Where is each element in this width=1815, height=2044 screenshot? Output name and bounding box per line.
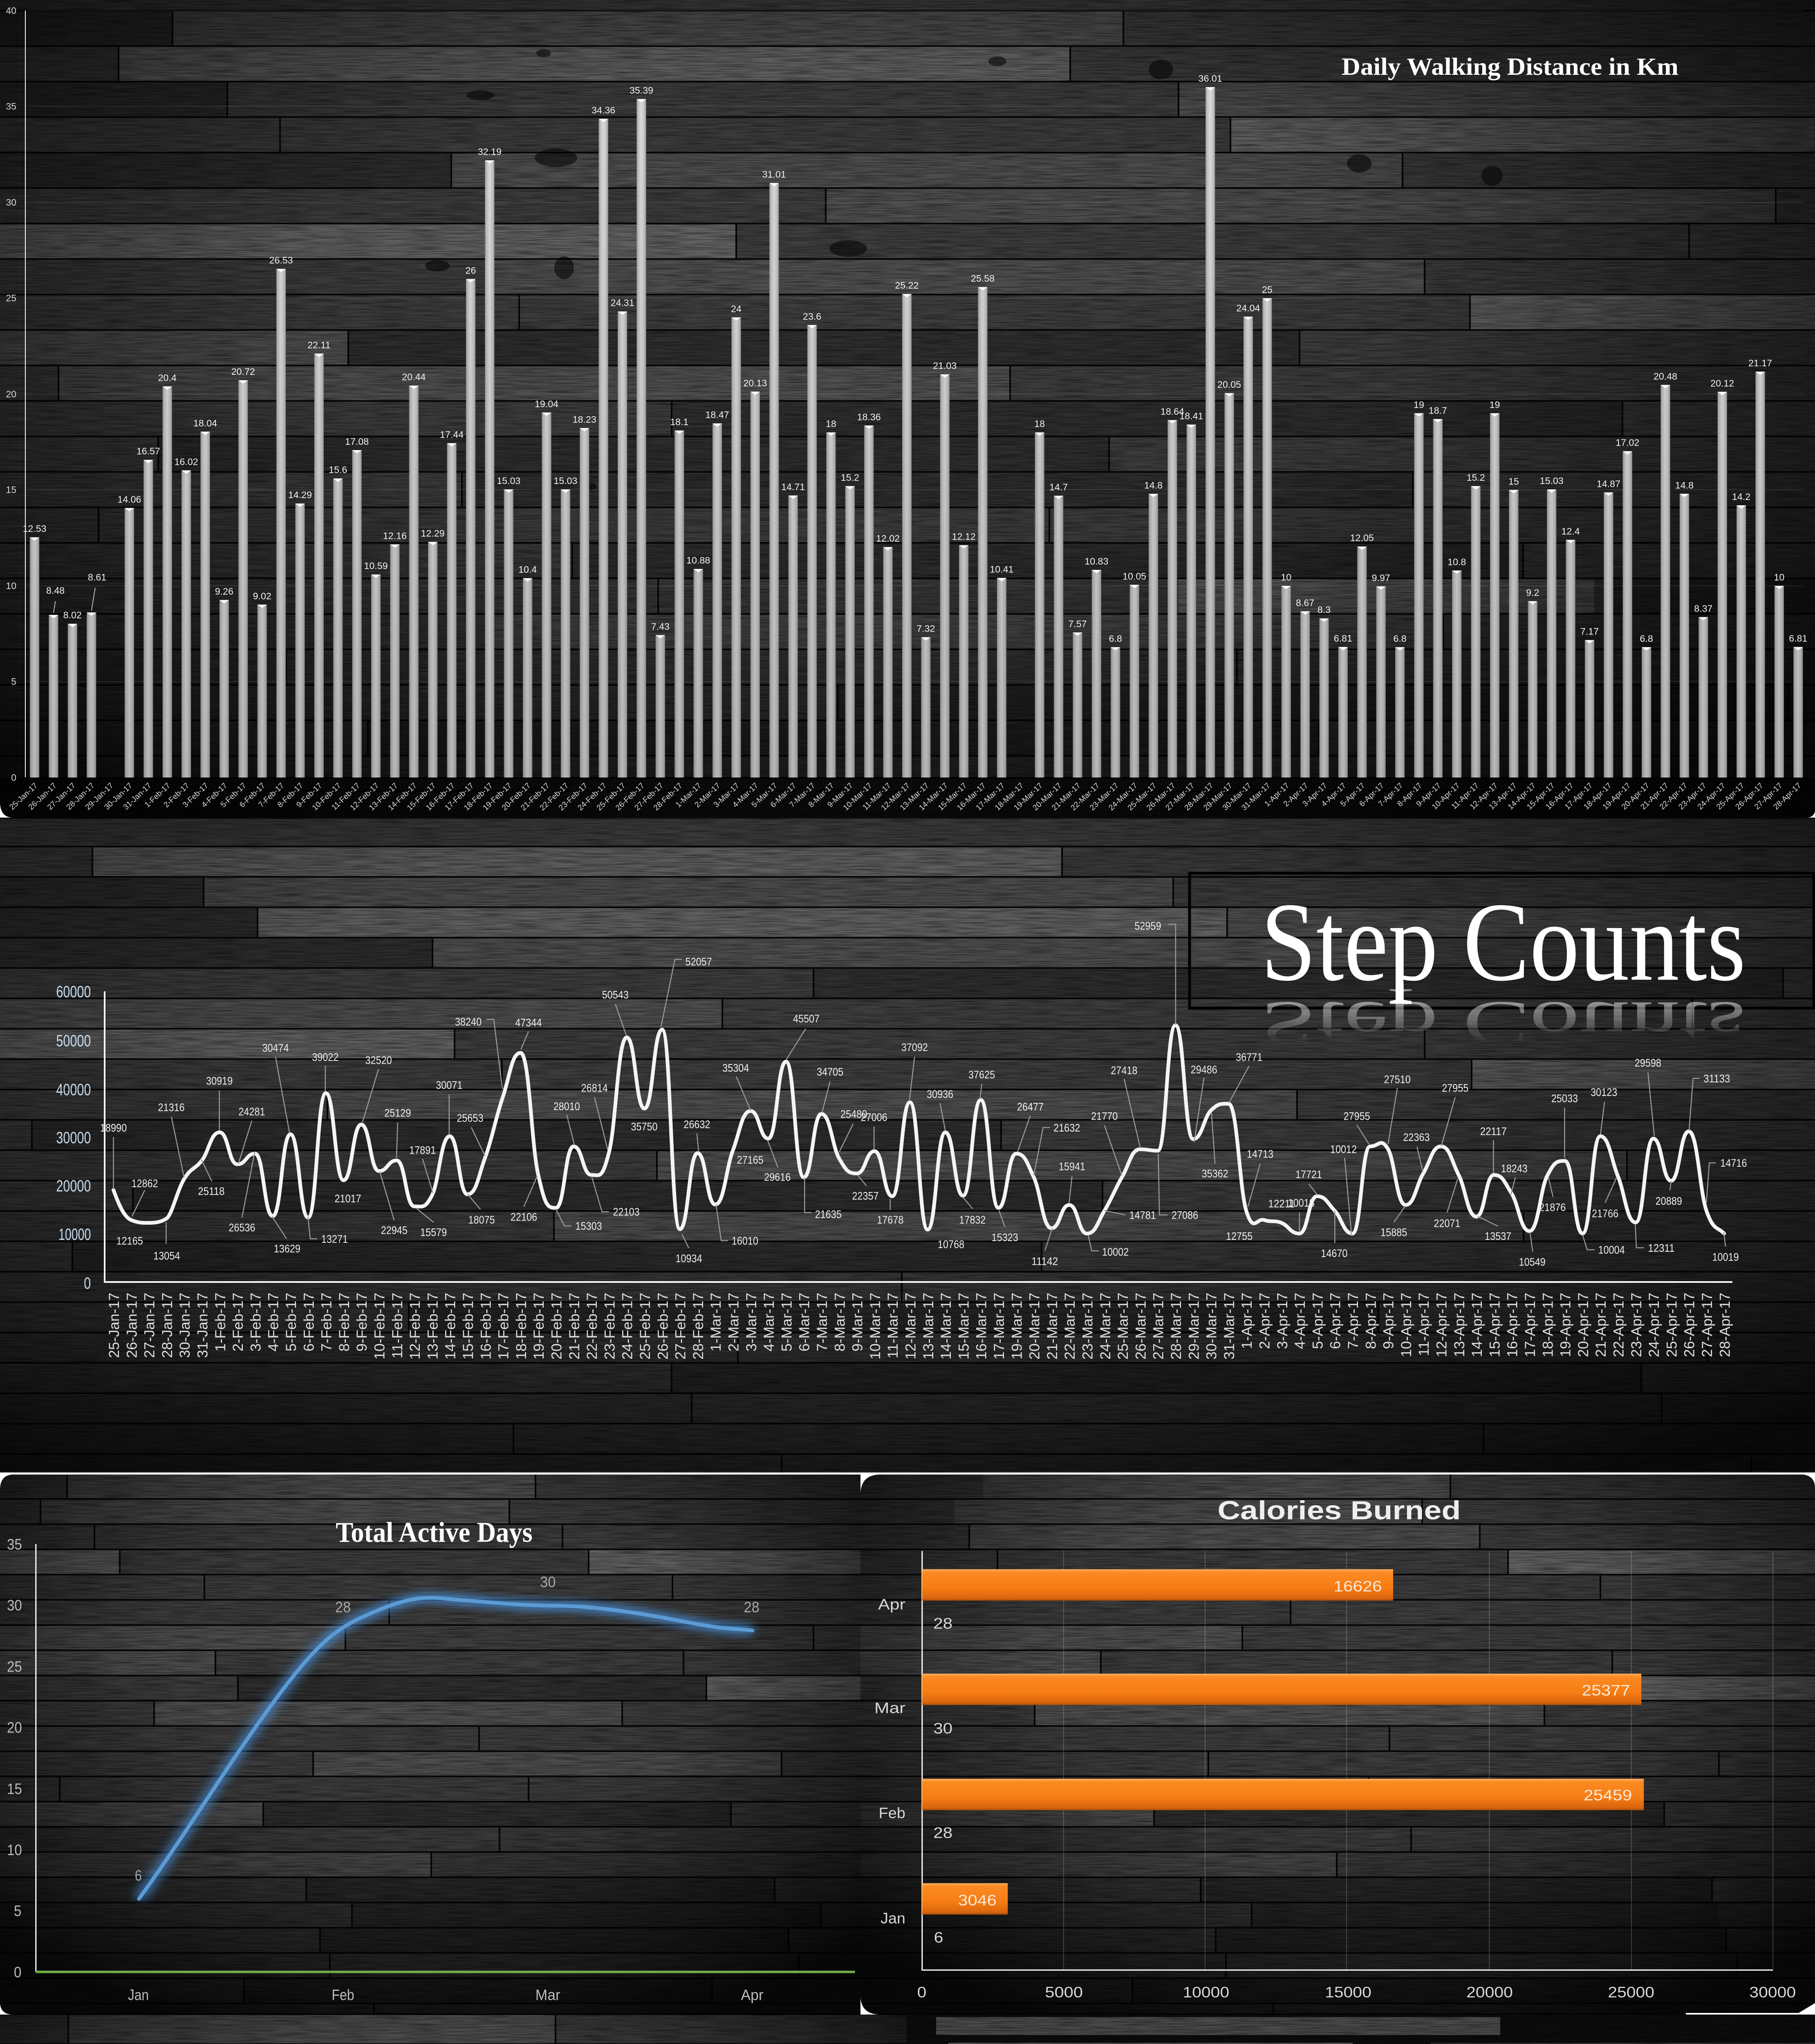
value labels: 27510 bbox=[1384, 1074, 1411, 1086]
value labels: 18243 bbox=[1501, 1163, 1528, 1175]
axes bbox=[35, 1544, 36, 1972]
top section spotlight bbox=[0, 0, 1815, 819]
wood planks: top section bbox=[0, 0, 1815, 823]
bars bbox=[30, 87, 1803, 778]
data labels, leaders, axis numbers and title bbox=[56, 880, 1747, 1292]
value labels: 30123 bbox=[1591, 1086, 1617, 1098]
chart title: Calories Burned bbox=[1217, 1496, 1461, 1525]
doughnut panel spotlight bbox=[0, 2015, 907, 2044]
x axis labels: 0 bbox=[917, 1984, 926, 2001]
value labels: 13537 bbox=[1485, 1230, 1511, 1242]
value labels: 25480 bbox=[840, 1108, 867, 1121]
y axis labels: 30000 bbox=[56, 1128, 91, 1147]
step counts line bbox=[114, 1025, 1724, 1234]
leader lines bbox=[114, 924, 1725, 1252]
y axis labels: 20 bbox=[6, 389, 16, 399]
value labels: 26477 bbox=[1017, 1101, 1044, 1113]
wood planks: calories burned panel bbox=[860, 1474, 1815, 2013]
value labels: 16010 bbox=[732, 1235, 758, 1247]
y axis labels: 30 bbox=[6, 197, 16, 208]
value labels: 22103 bbox=[613, 1206, 640, 1218]
value labels: 12755 bbox=[1226, 1230, 1253, 1242]
white panel frames and corners bbox=[0, 803, 1815, 2044]
month labels: Feb bbox=[879, 1805, 905, 1822]
bars with date and value labels bbox=[8, 73, 1807, 812]
data labels, leaders, axis numbers and title: 10000 bbox=[58, 1225, 91, 1244]
value labels: 17678 bbox=[877, 1214, 903, 1226]
value labels: 21017 bbox=[334, 1192, 361, 1205]
value labels: 10768 bbox=[938, 1238, 964, 1251]
month labels bbox=[128, 1986, 764, 2004]
value labels: 12165 bbox=[117, 1235, 143, 1247]
bar value labels bbox=[958, 1578, 1632, 1909]
chart title: Daily Walking Distance in Km bbox=[1342, 53, 1678, 80]
value labels: 21632 bbox=[1053, 1122, 1080, 1134]
y axis labels: 0 bbox=[84, 1274, 91, 1292]
value labels: 27165 bbox=[737, 1154, 764, 1166]
month labels: Jan bbox=[881, 1910, 905, 1927]
value labels: 12311 bbox=[1648, 1242, 1674, 1254]
value labels: 37092 bbox=[901, 1041, 928, 1053]
panel: daily walking distance bar chart bbox=[6, 5, 1808, 812]
value labels: 14713 bbox=[1247, 1148, 1273, 1160]
value labels: 27086 bbox=[1172, 1209, 1198, 1221]
month labels: Feb bbox=[332, 1986, 354, 2004]
value labels: 15579 bbox=[420, 1226, 447, 1239]
data labels: 28 bbox=[335, 1598, 351, 1616]
value labels: 10934 bbox=[675, 1253, 702, 1265]
month labels bbox=[874, 1596, 905, 1927]
y axis labels: 0 bbox=[14, 1963, 21, 1981]
panel: total active days line chart bbox=[7, 1517, 855, 2004]
y axis labels: 40000 bbox=[56, 1080, 91, 1099]
value labels: 15941 bbox=[1059, 1161, 1085, 1173]
y axis and gridlines bbox=[25, 11, 1808, 778]
wood planks: step counts section bbox=[0, 819, 1815, 1484]
step counts section spotlight bbox=[0, 819, 1815, 1472]
y axis labels: 10 bbox=[6, 580, 16, 591]
y axis labels: 10 bbox=[7, 1841, 22, 1858]
value labels: 15303 bbox=[576, 1220, 602, 1233]
value labels: 22117 bbox=[1480, 1125, 1507, 1138]
value labels: 35362 bbox=[1202, 1168, 1228, 1180]
value labels: 12862 bbox=[131, 1177, 158, 1190]
wood planks: distance doughnut panel bbox=[0, 2015, 907, 2044]
y axis labels: 60000 bbox=[56, 982, 91, 1001]
value labels: 22357 bbox=[852, 1190, 878, 1202]
orange bars bbox=[922, 1569, 1644, 1914]
data labels: 6 bbox=[135, 1867, 142, 1884]
value labels: 30071 bbox=[436, 1079, 462, 1091]
rotated date labels bbox=[8, 781, 1803, 812]
wood planks: total active days panel bbox=[0, 1474, 860, 2013]
y axis labels: 20 bbox=[7, 1719, 22, 1736]
value labels: 27006 bbox=[861, 1111, 887, 1123]
value labels: 14781 bbox=[1129, 1209, 1156, 1221]
month labels: Jan bbox=[128, 1986, 149, 2004]
value labels: 29598 bbox=[1635, 1057, 1661, 1069]
value labels: 17721 bbox=[1295, 1168, 1322, 1181]
value labels: 10019 bbox=[1712, 1251, 1739, 1263]
value labels: 10004 bbox=[1598, 1244, 1625, 1256]
month labels: Apr bbox=[878, 1596, 905, 1613]
value labels: 18990 bbox=[100, 1122, 127, 1134]
value labels: 29616 bbox=[764, 1171, 791, 1183]
value labels: 22363 bbox=[1403, 1131, 1430, 1143]
value labels: 29486 bbox=[1191, 1064, 1217, 1076]
active days labels bbox=[933, 1615, 952, 1946]
value labels: 45507 bbox=[793, 1013, 820, 1025]
value labels: 25118 bbox=[198, 1185, 224, 1197]
x axis labels: 5000 bbox=[1045, 1984, 1083, 2001]
blue line glow bbox=[139, 1598, 753, 1899]
value labels: 14716 bbox=[1720, 1157, 1747, 1169]
value labels: 17832 bbox=[959, 1214, 986, 1226]
vertical date labels bbox=[106, 1293, 1733, 1360]
value labels: 21766 bbox=[1592, 1208, 1618, 1220]
gridlines bbox=[1064, 1551, 1773, 1970]
y axis labels: 5 bbox=[11, 676, 16, 687]
data labels bbox=[135, 1573, 760, 1884]
value labels: 20889 bbox=[1656, 1195, 1682, 1207]
chart title: Total Active Days bbox=[336, 1517, 533, 1548]
value labels: 18075 bbox=[468, 1214, 495, 1226]
value labels: 34705 bbox=[817, 1066, 843, 1078]
x axis labels: 10000 bbox=[1183, 1984, 1229, 2001]
y axis labels bbox=[56, 982, 91, 1292]
x axis labels: 25000 bbox=[1608, 1984, 1654, 2001]
value labels: 14670 bbox=[1321, 1247, 1347, 1260]
calories burned panel spotlight bbox=[860, 1474, 1815, 2015]
value labels: 28010 bbox=[553, 1100, 580, 1113]
value labels: 10549 bbox=[1519, 1256, 1546, 1269]
wood knots: top section bbox=[425, 49, 1503, 491]
value labels: 50543 bbox=[602, 989, 629, 1001]
value labels: 52959 bbox=[1134, 920, 1161, 932]
value labels: 31133 bbox=[1703, 1073, 1730, 1085]
value labels: 10002 bbox=[1102, 1246, 1129, 1258]
value labels: 35304 bbox=[722, 1062, 749, 1074]
value labels: 30919 bbox=[206, 1075, 233, 1087]
y axis labels: 0 bbox=[11, 772, 16, 783]
value labels: 26632 bbox=[683, 1118, 710, 1131]
value labels: 26814 bbox=[581, 1082, 608, 1094]
value labels: 25653 bbox=[457, 1112, 483, 1124]
value labels: 13054 bbox=[153, 1250, 180, 1262]
value labels: 26536 bbox=[229, 1221, 255, 1234]
active days labels: 30 bbox=[933, 1720, 952, 1737]
value labels: 10018 bbox=[1288, 1197, 1315, 1209]
panel: step counts line chart bbox=[56, 873, 1814, 1360]
total active days panel spotlight bbox=[0, 1474, 860, 2015]
value labels: 30474 bbox=[262, 1042, 289, 1054]
y axis labels: 40 bbox=[6, 5, 16, 16]
blue line bbox=[139, 1598, 753, 1899]
value labels: 27955 bbox=[1442, 1082, 1468, 1094]
panel: calories burned bar chart bbox=[874, 1496, 1796, 2001]
active days labels: 6 bbox=[934, 1929, 943, 1946]
value labels: 36771 bbox=[1236, 1051, 1262, 1063]
value labels bbox=[100, 920, 1747, 1269]
value labels: 22945 bbox=[381, 1224, 408, 1237]
y axis labels: 30 bbox=[7, 1597, 22, 1614]
value labels: 25129 bbox=[384, 1107, 411, 1119]
value labels: 37625 bbox=[968, 1069, 995, 1081]
y axis labels: 35 bbox=[6, 101, 16, 112]
x axis labels bbox=[917, 1984, 1796, 2001]
value labels: 22071 bbox=[1434, 1217, 1461, 1230]
axes bbox=[105, 991, 1732, 1282]
value labels: 30936 bbox=[927, 1088, 953, 1100]
bar value labels: 3046 bbox=[958, 1892, 997, 1909]
value labels: 22106 bbox=[511, 1211, 537, 1224]
axes bbox=[922, 1551, 1773, 1970]
value labels: 47344 bbox=[515, 1017, 542, 1029]
value labels: 21876 bbox=[1539, 1201, 1566, 1214]
title frame bbox=[1190, 873, 1814, 1008]
y axis labels: 20000 bbox=[56, 1177, 91, 1195]
bar value labels: 16626 bbox=[1333, 1578, 1382, 1595]
active days labels: 28 bbox=[933, 1615, 952, 1632]
value labels: 25033 bbox=[1551, 1092, 1578, 1105]
wood strip above the table bbox=[907, 2015, 1815, 2044]
data labels: 28 bbox=[744, 1598, 760, 1616]
y axis labels: 50000 bbox=[56, 1031, 91, 1050]
month labels: Apr bbox=[741, 1986, 764, 2004]
value labels: 32520 bbox=[365, 1054, 392, 1067]
value labels: 27955 bbox=[1344, 1110, 1370, 1123]
y axis labels: 15 bbox=[7, 1780, 22, 1797]
value labels: 52057 bbox=[686, 956, 712, 968]
y axis labels bbox=[7, 1535, 22, 1981]
x axis labels: 20000 bbox=[1466, 1984, 1513, 2001]
value labels: 15885 bbox=[1380, 1226, 1407, 1239]
y axis labels bbox=[6, 5, 16, 783]
value labels: 21770 bbox=[1091, 1110, 1118, 1123]
bar value labels bbox=[22, 73, 1807, 644]
value labels: 21635 bbox=[815, 1208, 842, 1221]
value labels: 21316 bbox=[158, 1101, 185, 1114]
month labels: Mar bbox=[874, 1699, 905, 1717]
value labels: 11142 bbox=[1031, 1255, 1058, 1268]
y axis labels: 35 bbox=[7, 1535, 22, 1553]
leader lines for shifted value labels bbox=[54, 588, 95, 613]
data labels: 30 bbox=[540, 1573, 556, 1591]
y axis labels: 25 bbox=[7, 1658, 22, 1675]
value labels: 10012 bbox=[1330, 1143, 1357, 1156]
green baseline bbox=[36, 1971, 855, 1973]
value labels: 13271 bbox=[321, 1233, 348, 1245]
value labels: 12211 bbox=[1268, 1198, 1295, 1210]
month labels: Mar bbox=[536, 1986, 560, 2004]
value labels: 24281 bbox=[238, 1106, 265, 1118]
bar value labels: 25377 bbox=[1582, 1682, 1630, 1699]
value labels: 38240 bbox=[455, 1016, 482, 1028]
y axis labels: 25 bbox=[6, 293, 16, 303]
active days labels: 28 bbox=[933, 1824, 952, 1841]
value labels: 13629 bbox=[274, 1243, 300, 1255]
white bevel tips on the bars bbox=[30, 87, 1803, 650]
value labels: 15323 bbox=[992, 1231, 1018, 1244]
y axis labels: 5 bbox=[14, 1902, 21, 1919]
value labels: 17891 bbox=[409, 1144, 436, 1156]
value labels: 39022 bbox=[312, 1051, 338, 1063]
y axis labels: 15 bbox=[6, 484, 16, 495]
bar value labels: 25459 bbox=[1584, 1787, 1632, 1804]
value labels: 35750 bbox=[631, 1121, 658, 1133]
value labels: 27418 bbox=[1111, 1065, 1137, 1077]
x axis labels: 15000 bbox=[1325, 1984, 1371, 2001]
dark strip under the bars bbox=[0, 778, 1815, 818]
